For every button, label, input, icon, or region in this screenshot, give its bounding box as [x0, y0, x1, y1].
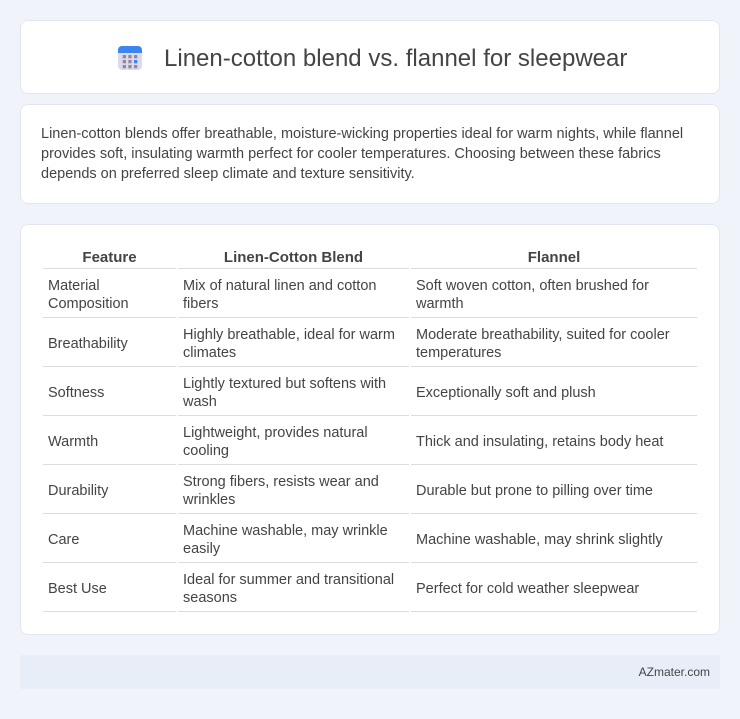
cell: wrinkles [183, 492, 235, 508]
footer bar [20, 655, 720, 689]
cell [183, 523, 388, 557]
summary text: provides soft, insulating warmth perfect for cooler temperatures. Choosing between these fabrics [41, 146, 661, 162]
cell: Soft woven cotton, often brushed for [416, 278, 649, 294]
cell [416, 278, 649, 312]
row: Material Composition: Material [48, 278, 100, 294]
cell: easily [183, 541, 220, 557]
summary text: Linen-cotton blends offer breathable, moisture-wicking properties ideal for warm nights, while flannel [41, 126, 683, 142]
header: Linen-Cotton Blend: Linen-Cotton Blend [224, 249, 363, 266]
row: Breathability: Breathability [48, 336, 128, 352]
cell: cooling [183, 443, 229, 459]
header: Feature: Feature [82, 249, 137, 266]
title card [20, 20, 720, 94]
row: Softness: Softness [48, 385, 104, 401]
cell: Exceptionally soft and plush [416, 385, 596, 401]
cell: Durable but prone to pilling over time [416, 483, 653, 499]
header: Flannel: Flannel [528, 249, 580, 266]
cell: Lightweight, provides natural [183, 425, 368, 441]
cell: Highly breathable, ideal for warm [183, 327, 395, 343]
row: Durability: Durability [48, 483, 108, 499]
cell: Perfect for cold weather sleepwear [416, 581, 639, 597]
cell: fibers [183, 296, 218, 312]
row: Care: Care [48, 532, 79, 548]
cell: Moderate breathability, suited for cooler [416, 327, 670, 343]
row: Material Composition [48, 278, 129, 312]
cell [183, 376, 386, 410]
cell: temperatures [416, 345, 501, 361]
cell [183, 327, 395, 361]
cell: warmth [416, 296, 464, 312]
row: Material Composition: Composition [48, 296, 129, 312]
icon: calendar [118, 46, 142, 70]
cell: Ideal for summer and transitional [183, 572, 394, 588]
summary text: depends on preferred sleep climate and texture sensitivity. [41, 166, 415, 182]
footer text: AZmater.com [639, 665, 710, 679]
cell [416, 327, 670, 361]
cell: Mix of natural linen and cotton [183, 278, 376, 294]
cell: climates [183, 345, 236, 361]
cell [183, 572, 394, 606]
title: Linen-cotton blend vs. flannel for sleepwear [164, 45, 627, 72]
cell: seasons [183, 590, 237, 606]
cell: Thick and insulating, retains body heat [416, 434, 663, 450]
cell: wash [183, 394, 217, 410]
cell [183, 474, 379, 508]
cell [183, 278, 376, 312]
table card [20, 224, 720, 635]
cell [183, 425, 368, 459]
cell: Strong fibers, resists wear and [183, 474, 379, 490]
row: Warmth: Warmth [48, 434, 98, 450]
cell: Machine washable, may shrink slightly [416, 532, 663, 548]
cell: Lightly textured but softens with [183, 376, 386, 392]
summary text [41, 126, 683, 182]
cell: Machine washable, may wrinkle [183, 523, 388, 539]
row: Best Use: Best Use [48, 581, 107, 597]
summary card [20, 104, 720, 204]
